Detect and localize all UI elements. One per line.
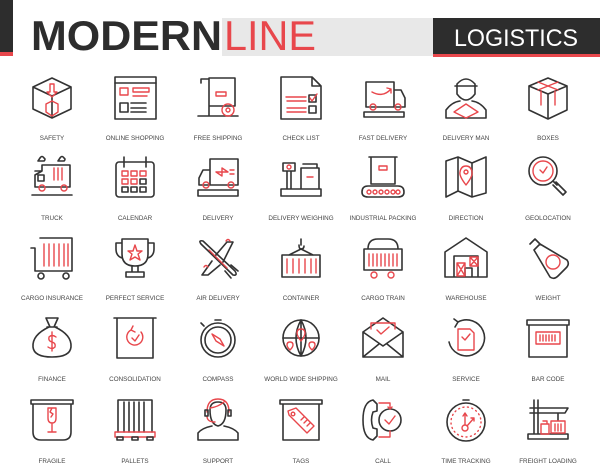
icon: pallets: [115, 400, 155, 440]
labels: CHECK LIST: [282, 135, 320, 142]
labels: CONTAINER: [283, 295, 320, 302]
labels: GEOLOCATION: [525, 215, 571, 222]
labels: FINANCE: [38, 376, 66, 383]
labels: [21, 135, 577, 465]
icon: delivery man: [446, 79, 486, 118]
labels: DIRECTION: [449, 215, 484, 222]
icon: cargo insurance: [31, 238, 72, 279]
labels: DELIVERY: [202, 215, 234, 222]
icon: call: [363, 400, 401, 440]
labels: FREE SHIPPING: [194, 135, 242, 142]
icon: truck: [32, 156, 72, 195]
icon: fragile: [31, 400, 73, 440]
icon: freight loading: [528, 400, 568, 439]
title: MODERN: [31, 12, 222, 59]
labels: AIR DELIVERY: [196, 295, 240, 302]
labels: CALENDAR: [118, 215, 153, 222]
header: [0, 0, 600, 59]
icon: compass: [201, 320, 235, 357]
labels: TRUCK: [41, 215, 64, 222]
header: LINE: [224, 12, 316, 59]
icon: fast delivery: [364, 82, 405, 117]
icon: bar code: [527, 320, 569, 357]
labels: COMPASS: [202, 376, 234, 383]
icon: perfect service: [116, 239, 154, 277]
icon: finance: [33, 318, 71, 357]
icon: container: [282, 239, 320, 277]
icon: weight: [530, 239, 568, 278]
logistics badge: LOGISTICS: [454, 25, 578, 52]
icon: calendar: [116, 157, 154, 197]
icon: free shipping: [198, 78, 238, 116]
labels: CONSOLIDATION: [109, 376, 161, 383]
labels: WEIGHT: [535, 295, 561, 302]
icon: direction: [446, 157, 486, 197]
icon: support: [198, 399, 238, 440]
labels: MAIL: [376, 376, 391, 383]
labels: WAREHOUSE: [445, 295, 487, 302]
icon: air delivery: [200, 240, 238, 278]
icon: industrial packing: [362, 157, 404, 197]
logistics badge: [433, 18, 600, 57]
labels: CARGO TRAIN: [361, 295, 405, 302]
labels: SERVICE: [452, 376, 480, 383]
icon: time tracking: [447, 400, 485, 441]
labels: CALL: [375, 458, 391, 465]
labels: ONLINE SHOPPING: [106, 135, 164, 142]
labels: FRAGILE: [39, 458, 65, 465]
labels: CARGO INSURANCE: [21, 295, 83, 302]
icon: safety: [33, 78, 71, 118]
icon: mail: [363, 318, 403, 357]
icon: cargo train: [364, 239, 402, 278]
labels: DELIVERY WEIGHING: [268, 215, 334, 222]
icon: delivery weighing: [281, 163, 321, 196]
labels: SAFETY: [40, 135, 65, 142]
icon: online shopping: [115, 77, 156, 119]
labels: BAR CODE: [532, 376, 564, 383]
labels: DELIVERY MAN: [443, 135, 490, 142]
labels: INDUSTRIAL PACKING: [350, 215, 417, 222]
labels: SUPPORT: [203, 458, 233, 465]
icon: delivery: [198, 159, 238, 196]
icon: tags: [280, 400, 322, 440]
labels: TIME TRACKING: [441, 458, 491, 465]
icon: geolocation: [529, 157, 566, 195]
labels: TAGS: [293, 458, 309, 465]
labels: WORLD WIDE SHIPPING: [264, 376, 338, 383]
labels: BOXES: [537, 135, 559, 142]
labels: PERFECT SERVICE: [106, 295, 164, 302]
icon: world wide shipping: [283, 320, 319, 356]
labels: FAST DELIVERY: [359, 135, 408, 142]
icon: warehouse: [445, 238, 487, 277]
labels: FREIGHT LOADING: [519, 458, 577, 465]
icon: check list: [281, 77, 321, 119]
icon: consolidation: [114, 318, 156, 358]
icon: service: [449, 319, 485, 356]
labels: PALLETS: [121, 458, 149, 465]
icon: boxes: [529, 78, 567, 119]
